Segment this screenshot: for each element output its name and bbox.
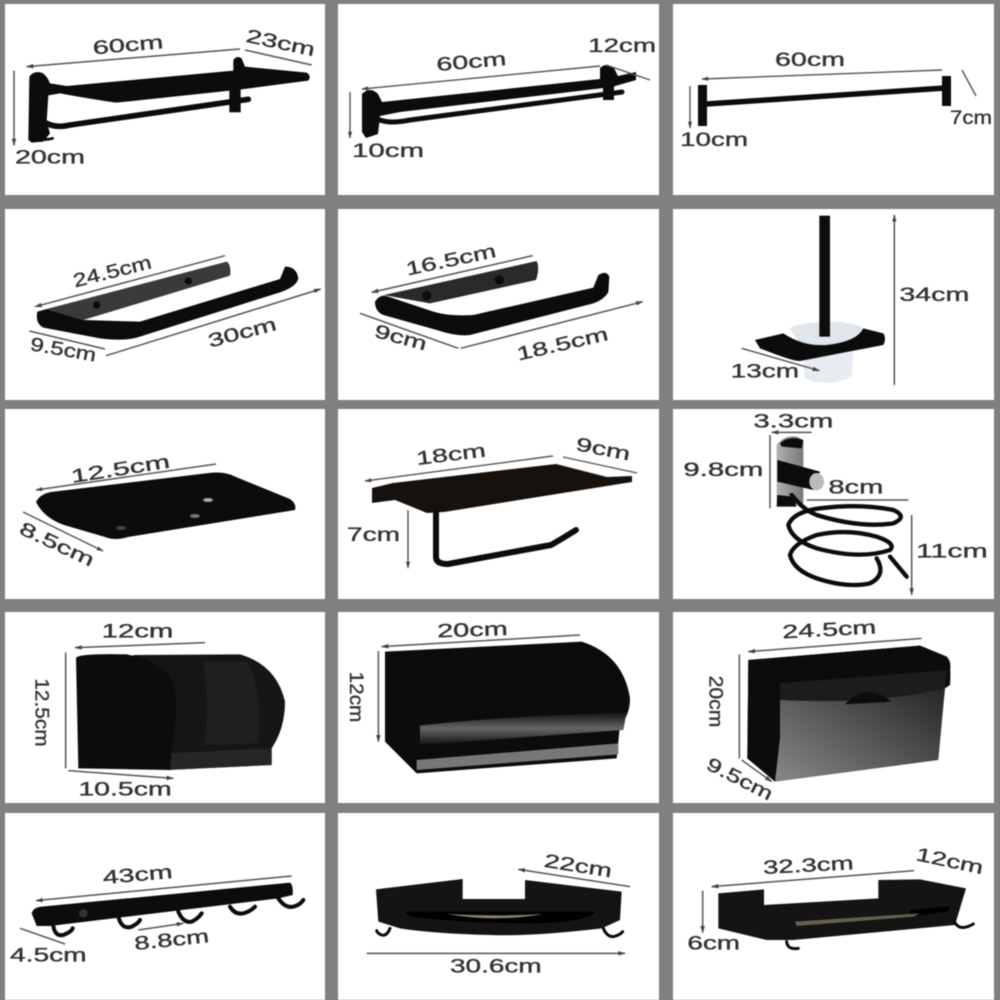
panel: paper holder 18.5cm [360, 241, 643, 366]
panel: tissue box: 20cm [704, 676, 725, 727]
panel: folding towel shelf: 23cm [244, 26, 317, 61]
panel: wall shelf: 32.3cm [762, 853, 854, 879]
panel: corner shelf: 22cm [543, 851, 613, 882]
panel: paper box wide: 20cm [437, 619, 508, 642]
panel: single towel bar: 7cm [950, 108, 992, 129]
panel: shelf with paper holder: 7cm [347, 525, 400, 546]
panel: corner shelf [367, 851, 630, 977]
panel: roll paper box: 10.5cm [78, 780, 172, 801]
panel: shelf with paper holder: 18cm [415, 441, 487, 470]
panel: toilet brush: 13cm [731, 362, 799, 383]
panel: tissue box [703, 617, 950, 805]
panel: hair dryer holder: 3.3cm [753, 411, 833, 432]
panel: folding towel shelf [14, 26, 317, 168]
panel: paper box wide: 12cm [345, 672, 366, 722]
panel: hair dryer holder: 8cm [828, 477, 883, 498]
panel: soap dish: 12.5cm [69, 452, 172, 488]
panel: double towel bar: 10cm [352, 141, 424, 162]
panel: paper holder 30cm: 24.5cm [71, 252, 154, 292]
panel: double towel bar [350, 36, 656, 162]
panel: paper holder 18.5cm: 18.5cm [515, 324, 610, 366]
panel: hook rail: 4.5cm [10, 946, 87, 967]
panel: wall shelf: 12cm [914, 844, 985, 879]
panel: shelf with paper holder [347, 434, 637, 568]
panel: toilet brush: 34cm [899, 285, 969, 306]
panel: toilet brush [731, 215, 969, 385]
panel: roll paper box: 12.5cm [30, 678, 51, 747]
panel: shelf with paper holder: 9cm [574, 434, 632, 465]
panel: folding towel shelf: 60cm [92, 32, 164, 59]
panel: paper holder 30cm [28, 252, 321, 366]
panel: paper holder 30cm: 30cm [206, 314, 279, 352]
panel: double towel bar: 60cm [436, 49, 507, 76]
panel: wall shelf [687, 844, 985, 954]
panel: hair dryer holder [683, 411, 988, 595]
panel: corner shelf: 30.6cm [450, 956, 542, 977]
panel: soap dish [16, 452, 295, 571]
panel: paper holder 18.5cm: 16.5cm [404, 241, 498, 281]
panel: folding towel shelf: 20cm [15, 147, 85, 168]
panel: tissue box: 9.5cm [703, 754, 776, 805]
panel: single towel bar [680, 50, 992, 151]
panel: hair dryer holder: 11cm [916, 542, 988, 563]
panel: roll paper box: 12cm [102, 622, 173, 643]
panel: hook rail: 8.8cm [133, 926, 210, 955]
panel: single towel bar: 10cm [680, 130, 748, 151]
panel: wall shelf: 6cm [687, 933, 740, 954]
panel: tissue box: 24.5cm [782, 617, 877, 643]
panel: hook rail [10, 862, 303, 967]
panel: soap dish: 8.5cm [16, 518, 97, 571]
panel: hair dryer holder: 9.8cm [683, 460, 763, 481]
panel: roll paper box [30, 622, 285, 801]
panel: single towel bar: 60cm [775, 50, 845, 71]
panel: double towel bar: 12cm [588, 36, 656, 57]
panel: paper holder 18.5cm: 9cm [372, 321, 429, 355]
panel: paper holder 30cm: 9.5cm [28, 334, 98, 366]
panel: paper box wide [345, 619, 630, 773]
panel: hook rail: 43cm [102, 862, 174, 889]
